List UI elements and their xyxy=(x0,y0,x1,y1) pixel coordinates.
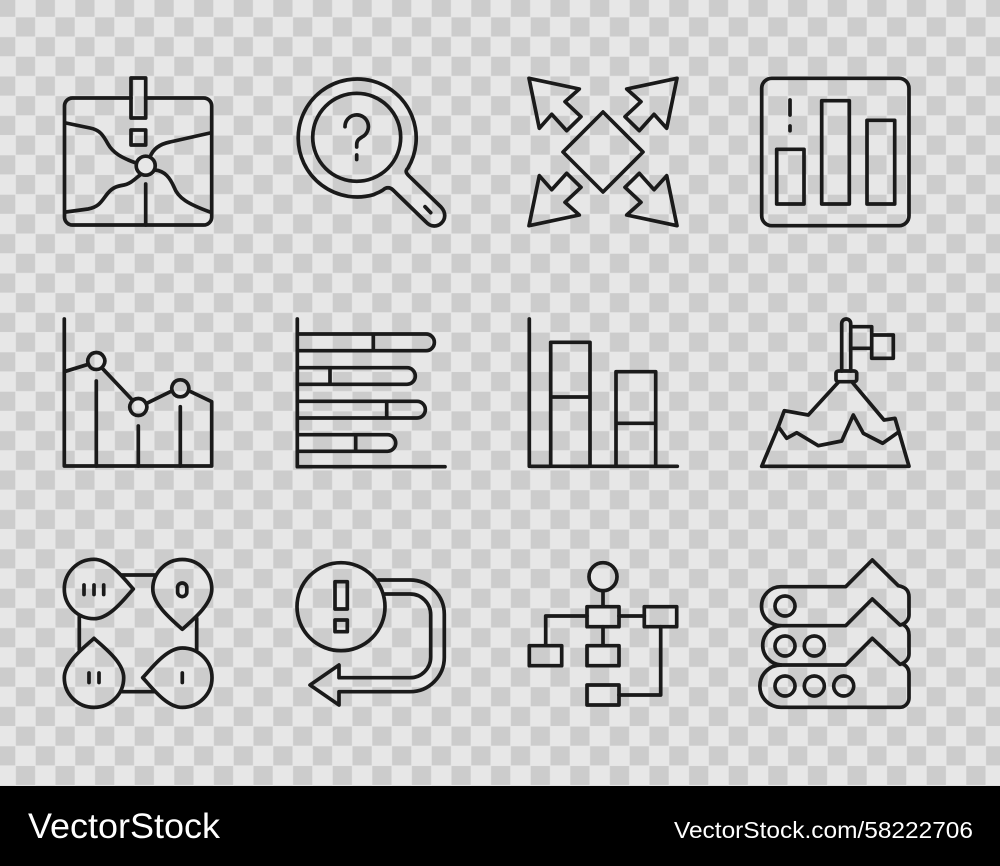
arrow bottom left xyxy=(529,173,581,226)
handle slot xyxy=(425,207,431,213)
icon: map with warning and crossing roads xyxy=(64,78,212,225)
pole base xyxy=(836,371,857,382)
icon: magnifying glass with question mark xyxy=(298,79,445,226)
axes xyxy=(529,319,677,466)
icon: mountain with flag xyxy=(762,319,909,466)
roads xyxy=(66,123,210,225)
row two xyxy=(763,625,909,665)
zero mark xyxy=(178,583,187,597)
question mark xyxy=(345,115,368,160)
icon: flowchart xyxy=(529,563,677,705)
icon: stacked column chart xyxy=(529,319,677,466)
row one xyxy=(762,560,909,626)
row three xyxy=(760,664,909,707)
map frame xyxy=(64,98,212,225)
columns xyxy=(551,342,656,466)
exclamation xyxy=(788,100,792,131)
pole xyxy=(842,319,851,371)
exclamation mark xyxy=(131,78,146,145)
arrow bottom right xyxy=(625,173,677,226)
circle xyxy=(297,563,385,651)
image reference: VectorStock.com/58222706 xyxy=(674,817,973,843)
pin top left xyxy=(64,559,133,619)
pin top right xyxy=(153,560,212,629)
snow line xyxy=(778,415,898,446)
lens xyxy=(313,93,401,181)
pin marks xyxy=(84,585,182,682)
pin bottom left xyxy=(64,638,124,707)
icon: stacked rows with circles and up arrows xyxy=(760,560,909,707)
frame xyxy=(762,78,909,226)
arrow top right xyxy=(625,78,677,131)
bars xyxy=(297,334,434,451)
diamond xyxy=(563,112,643,192)
exclamation xyxy=(335,582,347,632)
mountain xyxy=(762,382,909,466)
connectors xyxy=(546,591,661,695)
arrow top left xyxy=(529,78,581,131)
footer bar xyxy=(0,786,1000,866)
flag xyxy=(852,327,893,358)
icon: horizontal progress bar chart xyxy=(297,319,445,467)
indicator circles xyxy=(775,596,854,696)
start circle xyxy=(589,563,617,591)
connectors xyxy=(79,575,197,692)
icon: four map pins in a cycle xyxy=(64,559,212,707)
map pin circle xyxy=(136,156,155,175)
icon: exclamation circle with return arrow xyxy=(297,563,444,705)
axes and outline xyxy=(64,319,212,466)
magnifier body and handle xyxy=(298,79,445,226)
icon: four arrows around a diamond xyxy=(529,78,677,226)
icon: line chart with points xyxy=(64,319,212,466)
axes xyxy=(297,319,445,467)
flow boxes xyxy=(529,607,677,705)
bars xyxy=(777,101,895,204)
data points xyxy=(88,352,189,416)
icon: framed bar chart with exclamation xyxy=(762,78,909,226)
brand name: VectorStock xyxy=(28,807,221,846)
return arrow xyxy=(310,580,444,705)
pin bottom right xyxy=(143,648,212,707)
vertical drops xyxy=(96,381,180,466)
